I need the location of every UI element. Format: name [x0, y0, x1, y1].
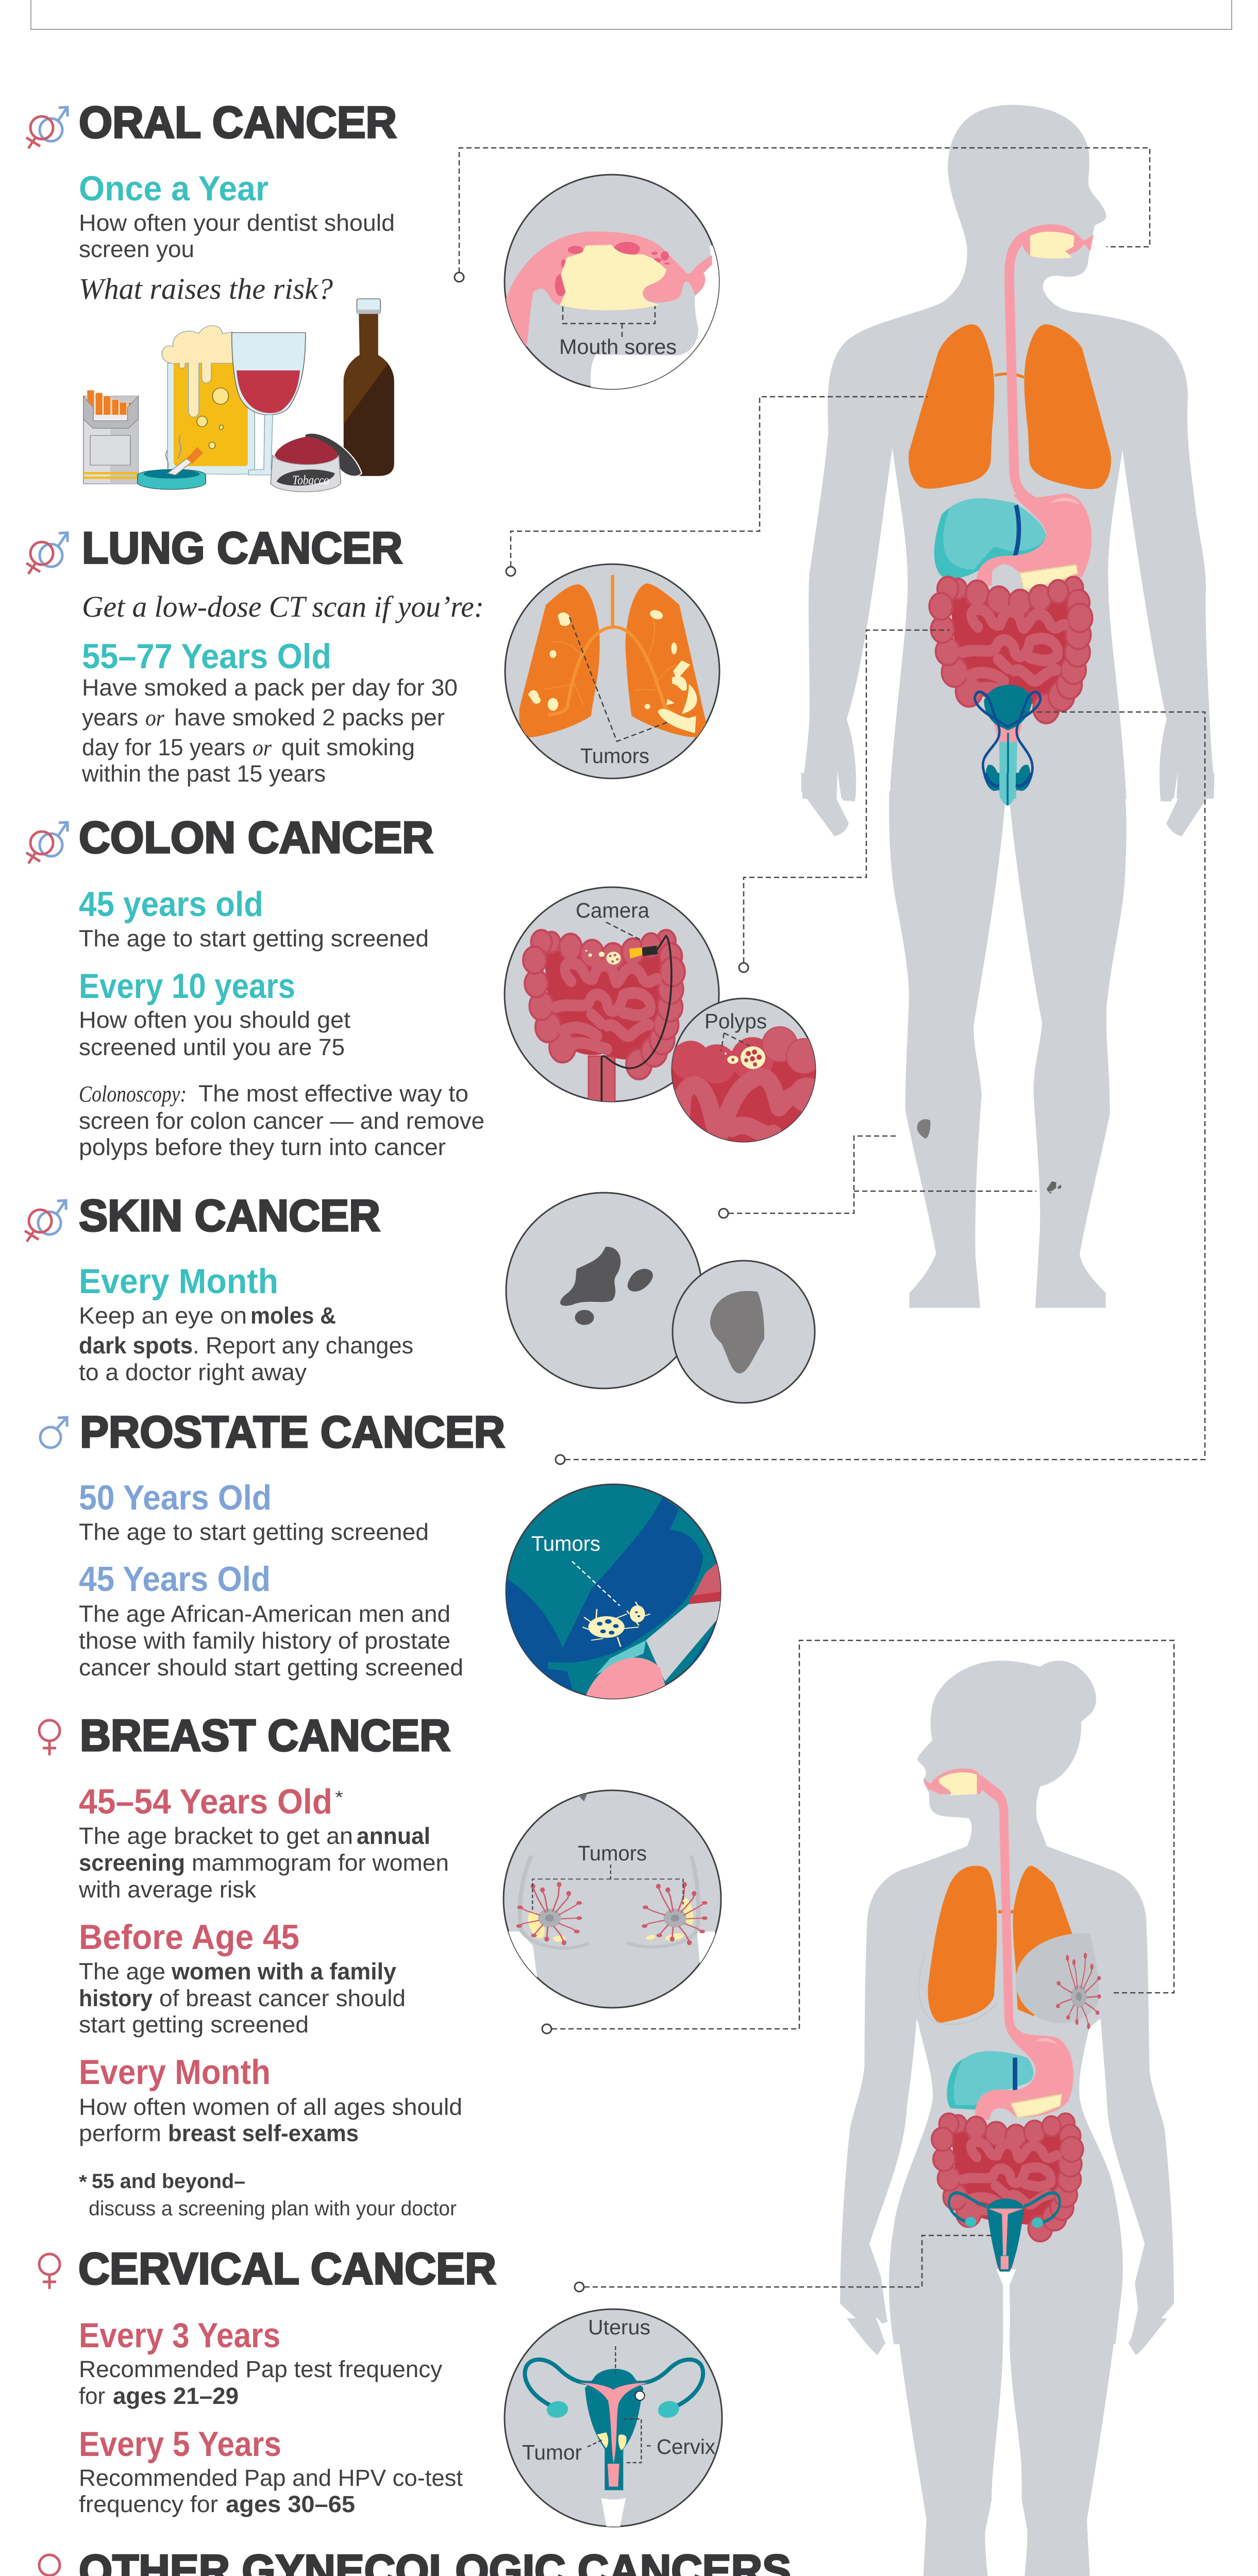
beer mug — [162, 326, 255, 474]
lungs — [909, 324, 1111, 489]
colonoscopy note — [79, 1080, 484, 1160]
label: tumor: Tumor — [522, 2441, 582, 2464]
label: Tumors — [531, 1532, 600, 1555]
stat: every 5 years: Every 5 Years — [79, 2425, 281, 2464]
description: those with family history of prostate — [79, 1628, 450, 1654]
esophagus and stomach — [977, 236, 1092, 586]
description: The age to start getting screened — [79, 925, 429, 952]
description: or — [253, 735, 272, 760]
footnote: discuss a screening plan with your doctor — [89, 2197, 457, 2220]
description: Recommended Pap test frequency — [79, 2356, 443, 2382]
circle: prostate tumors — [496, 1484, 725, 1704]
male organs — [909, 225, 1111, 799]
panel: lung cancer — [26, 523, 719, 787]
icon: male and female symbols — [26, 533, 68, 574]
top box outline — [31, 0, 1232, 29]
liver — [934, 498, 1046, 579]
description: have smoked 2 packs per — [174, 704, 445, 731]
circle: polyps — [670, 998, 825, 1144]
description: women with a family — [171, 1958, 396, 1985]
description: How often women of all ages should — [79, 2094, 462, 2120]
description — [79, 2356, 443, 2409]
stat: every 10 years: Every 10 years — [79, 967, 295, 1006]
description: ages 30–65 — [226, 2491, 355, 2517]
colonoscopy note: The most effective way to — [198, 1080, 468, 1107]
description: history — [79, 1985, 153, 2011]
wine bottle — [344, 299, 394, 476]
handwritten intro: Get a low-dose CT scan if you’re: — [82, 590, 484, 623]
description: with average risk — [78, 1876, 257, 1903]
stat: every 3 years: Every 3 Years — [79, 2316, 280, 2355]
description: breast self-exams — [168, 2120, 359, 2146]
description: quit smoking — [281, 734, 415, 760]
stat: 55-77: 55–77 Years Old — [82, 637, 331, 676]
male body figure — [801, 105, 1214, 1308]
connectors — [459, 148, 1205, 2287]
colonoscopy note: screen for colon cancer — and remove — [79, 1108, 484, 1134]
description: screen you — [79, 236, 194, 262]
description: dark spots — [79, 1332, 193, 1359]
description: perform — [79, 2120, 161, 2146]
description — [78, 1823, 449, 1903]
heading: SKIN CANCER — [79, 1191, 380, 1241]
stat: 45 years old: 45 years old — [79, 885, 263, 924]
heading: CERVICAL CANCER — [78, 2244, 496, 2294]
panel: colon cancer — [26, 813, 825, 1160]
colonoscopy note: polyps before they turn into cancer — [79, 1134, 446, 1160]
description: The age to start getting screened — [79, 1519, 429, 1545]
description — [79, 1601, 463, 1681]
stat: 45-54 years old: 45–54 Years Old — [79, 1782, 332, 1821]
description: annual — [357, 1823, 430, 1849]
circle: breast tumors — [504, 1790, 721, 2008]
label: uterus: Uterus — [588, 2315, 650, 2339]
heading: ORAL CANCER — [79, 98, 397, 147]
description: The age — [79, 1958, 165, 1985]
stat: every month: Every Month — [79, 1262, 278, 1301]
panel: cervical cancer — [39, 2244, 722, 2527]
connector end dots — [455, 273, 748, 2292]
description — [81, 674, 458, 787]
description: screened until you are 75 — [79, 1034, 345, 1060]
stat: 45 years old: 45 Years Old — [79, 1560, 271, 1599]
description: ages 21–29 — [113, 2383, 239, 2409]
description: mammogram for women — [192, 1850, 449, 1876]
illustration: risk factors — [83, 299, 394, 492]
description: to a doctor right away — [79, 1359, 307, 1385]
stat: 50 years old: 50 Years Old — [79, 1478, 272, 1517]
description: years — [82, 704, 138, 731]
icon: male and female symbols — [26, 822, 68, 863]
label: Tumors — [580, 744, 649, 768]
stat: every month: Every Month — [79, 2053, 271, 2092]
description: How often your dentist should — [79, 210, 395, 236]
heading: COLON CANCER — [79, 813, 433, 862]
colon — [929, 577, 1093, 723]
wine glass — [232, 333, 306, 475]
description: The age African-American men and — [79, 1601, 450, 1627]
description: How often you should get — [79, 1007, 351, 1033]
icon: female symbol — [39, 1720, 60, 1755]
description — [79, 210, 395, 262]
description — [79, 2094, 462, 2146]
heading: LUNG CANCER — [82, 523, 402, 573]
description: or — [145, 705, 165, 731]
icon: male symbol — [40, 1417, 67, 1448]
icon: male and female symbols — [25, 1200, 66, 1242]
stat: before age 45: Before Age 45 — [79, 1918, 299, 1957]
circle: colon with camera — [505, 887, 719, 1105]
label: Mouth sores — [559, 335, 677, 359]
description: of breast cancer should — [159, 1985, 406, 2011]
panel: other gynecologic cancers — [38, 2553, 791, 2576]
description: within the past 15 years — [81, 760, 326, 787]
circle: mouth — [505, 175, 722, 392]
footnote: * — [79, 2171, 87, 2192]
pancreas — [1011, 2094, 1062, 2117]
description — [79, 1302, 413, 1385]
icon: female symbol — [39, 2555, 60, 2576]
icon: female symbol — [39, 2254, 60, 2289]
prostate — [975, 685, 1041, 799]
description: . Report any changes — [193, 1332, 413, 1359]
ashtray with cigarette — [138, 435, 206, 489]
tobacco tin — [271, 433, 362, 492]
description — [79, 2465, 463, 2517]
circle: moles — [506, 1193, 702, 1388]
description — [79, 1958, 406, 2038]
circle: uterus — [505, 2309, 722, 2527]
panel: breast cancer — [39, 1711, 721, 2220]
female organs — [919, 1769, 1101, 2120]
description: The age bracket to get an — [79, 1823, 353, 1849]
mouth and palate — [1020, 225, 1094, 259]
stat: 45-54 years old: * — [335, 1788, 343, 1807]
panel: prostate cancer — [40, 1408, 725, 1704]
tobacco tin: Tobacco — [292, 473, 329, 487]
heading: PROSTATE CANCER — [80, 1408, 505, 1457]
footnote — [79, 2170, 457, 2220]
esophagus and stomach — [975, 1780, 1074, 2120]
description: day for 15 years — [82, 734, 245, 760]
female body figure — [840, 1660, 1174, 2576]
colonoscopy note: Colonoscopy: — [79, 1081, 187, 1107]
breast — [919, 1933, 1101, 2029]
description: moles & — [250, 1302, 336, 1329]
description — [79, 1007, 351, 1060]
handwritten question: What raises the risk? — [79, 272, 333, 306]
circle: lungs — [505, 564, 719, 778]
panel: oral cancer — [26, 98, 722, 492]
stat: once a year: Once a Year — [79, 169, 269, 208]
description: Have smoked a pack per day for 30 — [82, 674, 458, 701]
description: cancer should start getting screened — [79, 1654, 463, 1681]
label: Camera — [576, 899, 649, 922]
description: Keep an eye on — [79, 1302, 247, 1329]
lungs — [928, 1866, 1073, 2023]
mouth and palate — [923, 1769, 982, 1795]
description: start getting screened — [79, 2011, 309, 2038]
cigarette pack — [83, 390, 138, 484]
description: frequency for — [79, 2491, 218, 2517]
panel: skin cancer — [25, 1191, 815, 1403]
description: screening — [79, 1850, 185, 1876]
description: for — [79, 2383, 105, 2409]
description: Recommended Pap and HPV co-test — [79, 2465, 463, 2491]
heading: BREAST CANCER — [80, 1711, 450, 1760]
liver — [947, 2051, 1033, 2110]
icon: male and female symbols — [26, 107, 68, 148]
male lower organ tip — [983, 773, 1032, 806]
pancreas — [1020, 565, 1078, 590]
circle: dark spot — [673, 1261, 815, 1403]
label: Tumors — [578, 1841, 647, 1865]
footnote: 55 and beyond– — [92, 2170, 245, 2193]
female uterus — [949, 2193, 1060, 2272]
female colon — [932, 2113, 1083, 2242]
label: Polyps — [705, 1009, 767, 1033]
label: cervix: Cervix — [657, 2435, 715, 2459]
